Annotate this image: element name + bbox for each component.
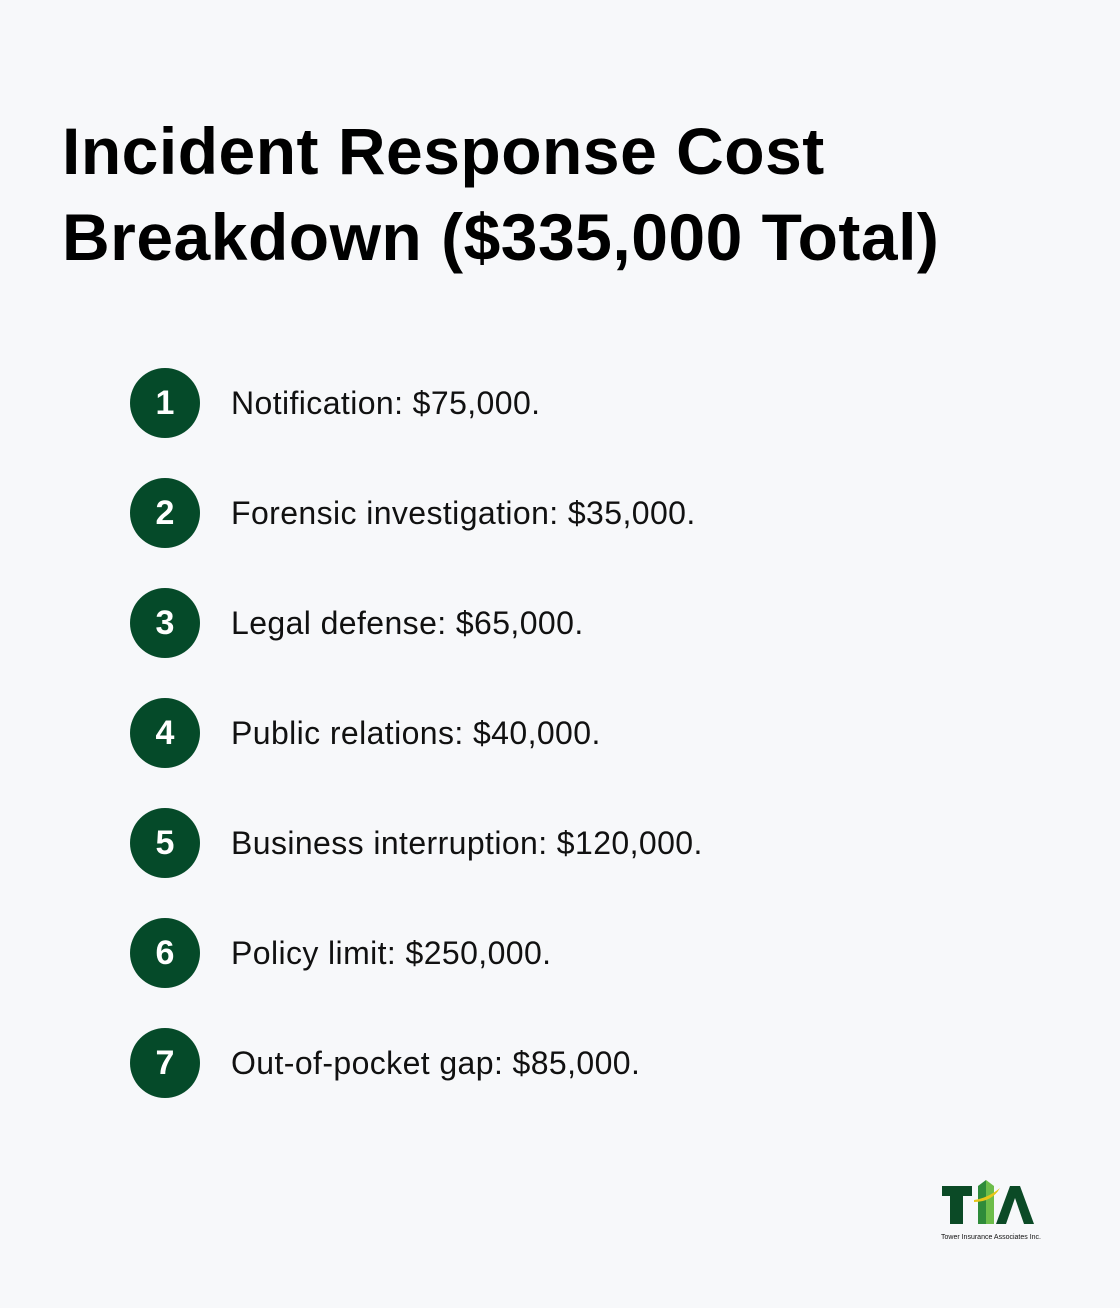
item 1 [130,368,540,438]
item 5: Business interruption: $120,000. [231,825,703,861]
item 6: Policy limit: $250,000. [231,935,551,971]
item 5 [130,808,703,878]
item 6 [130,918,551,988]
item 4: 4 [156,714,174,752]
logo: Tower Insurance Associates Inc. [941,1234,1041,1241]
item 6: 6 [156,934,174,972]
item 2 [130,478,696,548]
item 3 [130,588,584,658]
item 4: Public relations: $40,000. [231,715,601,751]
item 1: Notification: $75,000. [231,385,540,421]
item 3: 3 [156,604,174,642]
item 7: Out-of-pocket gap: $85,000. [231,1045,640,1081]
item 5: 5 [156,824,174,862]
item 4 [130,698,601,768]
item 7 [130,1028,640,1098]
item 1: 1 [156,384,174,422]
title [62,114,939,274]
item 3: Legal defense: $65,000. [231,605,584,641]
item 2: 2 [156,494,174,532]
title: Breakdown ($335,000 Total) [62,200,939,274]
item 2: Forensic investigation: $35,000. [231,495,696,531]
item 7: 7 [156,1044,174,1082]
logo [941,1180,1041,1241]
title: Incident Response Cost [62,114,825,188]
